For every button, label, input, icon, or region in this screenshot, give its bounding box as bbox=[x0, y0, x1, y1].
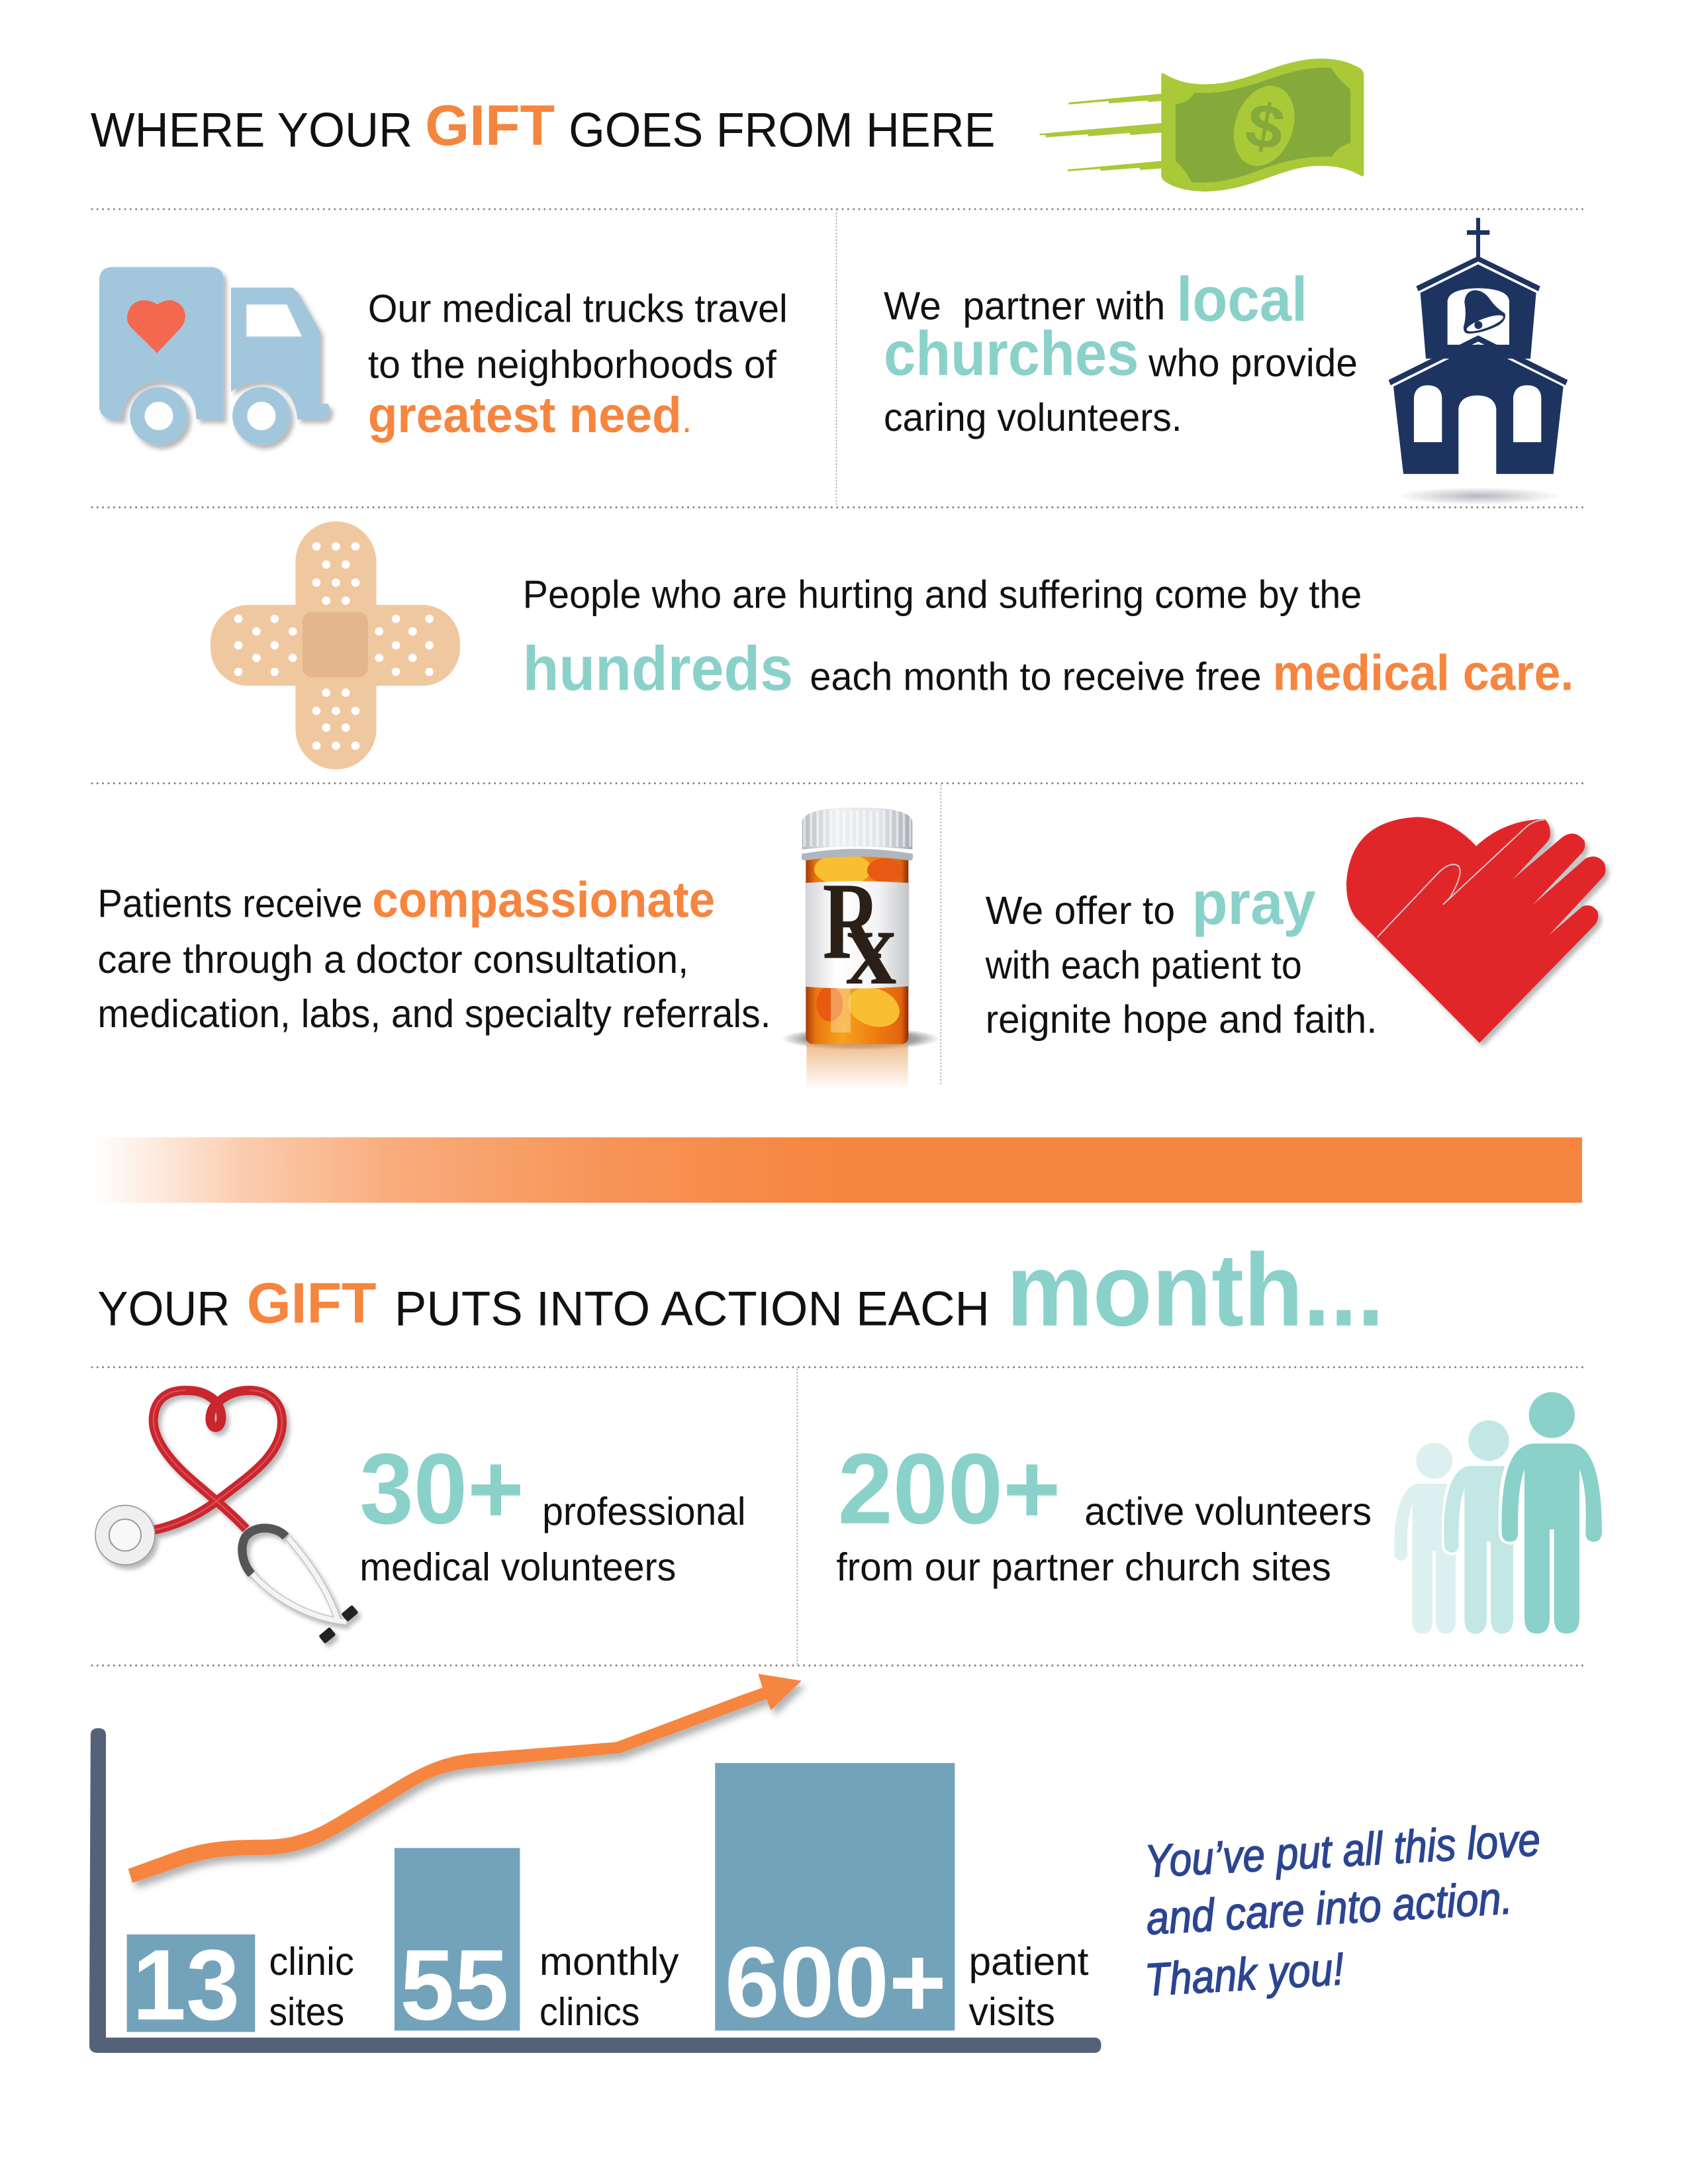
orange gradient band bbox=[95, 1137, 1582, 1203]
heading: where your gift goes from here: GOES FROM HERE bbox=[569, 102, 995, 157]
stat: 200+ active volunteers: 200+ bbox=[838, 1433, 1060, 1545]
text: local churches: who provide bbox=[1148, 342, 1358, 385]
icon: prescription bottle: x bbox=[846, 886, 896, 1008]
text: compassionate care: care through a doctor consultation, bbox=[97, 938, 688, 981]
icon: medical truck bbox=[99, 267, 330, 437]
bar: 55 monthly clinics: clinics bbox=[539, 1991, 640, 2034]
icon: three people bbox=[1394, 1392, 1602, 1633]
text: hundreds each month bbox=[523, 573, 1573, 704]
bar: 600+ patient visits: visits bbox=[968, 1991, 1055, 2034]
icon: flying dollar bill bbox=[1040, 59, 1364, 191]
heading: where your gift goes from here: GIFT bbox=[425, 94, 555, 158]
stat: 200+ active volunteers bbox=[836, 1433, 1372, 1589]
icon: heart hand bbox=[1346, 817, 1605, 1043]
icon: prescription bottle bbox=[781, 807, 940, 1090]
heading: your gift puts into action each month bbox=[97, 1233, 1384, 1348]
text: hundreds each month: People who are hurting and suffering come by the bbox=[523, 573, 1362, 616]
chart: growth bars and trend arrow bbox=[89, 1674, 1102, 2053]
icon: crossed bandage bbox=[211, 522, 460, 770]
bar: 600+ patient visits: patient bbox=[968, 1940, 1089, 1983]
text: medical trucks: Our medical trucks travel bbox=[368, 288, 788, 331]
handwritten thank you note: You’ve put all this love bbox=[1143, 1813, 1542, 1888]
stat: 30+ medical volunteers: medical volunteers bbox=[359, 1546, 676, 1589]
text: pray: with each patient to bbox=[985, 944, 1302, 987]
icon: church bbox=[1389, 218, 1568, 505]
handwritten thank you note: and care into action. bbox=[1145, 1872, 1514, 1944]
text: pray: We offer to bbox=[986, 889, 1175, 933]
text: medical trucks: to the neighborhoods of bbox=[368, 343, 776, 387]
heading: where your gift goes from here bbox=[91, 94, 995, 158]
text: compassionate care bbox=[97, 872, 771, 1036]
text: medical trucks bbox=[368, 288, 788, 443]
text: pray bbox=[985, 868, 1377, 1042]
arrow: upward trend bbox=[128, 1674, 802, 1883]
text: local churches bbox=[884, 264, 1358, 439]
stat: 30+ medical volunteers bbox=[359, 1433, 746, 1589]
stat: 30+ medical volunteers: professional bbox=[542, 1490, 746, 1533]
handwritten thank you note: Thank you! bbox=[1143, 1942, 1345, 2006]
heading: your gift puts into action each month: YOUR bbox=[97, 1281, 230, 1336]
text: local churches: caring volunteers. bbox=[884, 396, 1182, 439]
text: medical trucks: greatest need bbox=[368, 387, 682, 443]
text: hundreds each month: each month to receive free bbox=[810, 656, 1262, 699]
handwritten thank you note bbox=[1143, 1813, 1542, 2006]
stat: 200+ active volunteers: from our partner church sites bbox=[836, 1546, 1331, 1589]
text: local churches: churches bbox=[884, 319, 1139, 389]
text: pray: pray bbox=[1192, 868, 1316, 937]
heading: where your gift goes from here: WHERE YOUR bbox=[91, 102, 412, 157]
text: local churches: We partner with bbox=[884, 285, 1165, 328]
icon: stethoscope with heart tube bbox=[95, 1390, 359, 1644]
bar: 600+ patient visits: 600+ bbox=[725, 1927, 947, 2038]
heading: your gift puts into action each month: GIFT bbox=[247, 1271, 377, 1335]
bar: 13 clinic sites: clinic bbox=[269, 1940, 354, 1983]
stat: 30+ medical volunteers: 30+ bbox=[359, 1433, 524, 1545]
text: hundreds each month: hundreds bbox=[523, 634, 793, 704]
bar: 13 clinic sites: sites bbox=[269, 1991, 344, 2034]
bar: 13 clinic sites bbox=[127, 1929, 354, 2041]
icon: flying dollar bill: $ bbox=[1241, 89, 1290, 163]
bar: 55 monthly clinics bbox=[395, 1848, 679, 2041]
divider lines bbox=[92, 209, 1583, 1665]
heading: your gift puts into action each month: month... bbox=[1006, 1233, 1384, 1348]
text: local churches: local bbox=[1176, 264, 1307, 334]
chart axes bbox=[89, 1728, 1102, 2053]
icon: prescription bottle: R bbox=[823, 860, 881, 982]
text: hundreds each month: medical care. bbox=[1273, 645, 1573, 702]
text: compassionate care: medication, labs, and specialty referrals. bbox=[97, 993, 771, 1036]
bar: 55 monthly clinics: monthly bbox=[539, 1940, 679, 1983]
text: compassionate care: Patients receive bbox=[97, 883, 362, 926]
stat: 200+ active volunteers: active volunteers bbox=[1084, 1490, 1372, 1533]
bar: 13 clinic sites: 13 bbox=[132, 1929, 240, 2041]
text: medical trucks: . bbox=[682, 399, 692, 441]
heading: your gift puts into action each month: PUTS INTO ACTION EACH bbox=[395, 1281, 990, 1336]
text: compassionate care: compassionate bbox=[372, 872, 715, 929]
bar: 600+ patient visits bbox=[715, 1763, 1089, 2038]
text: pray: reignite hope and faith. bbox=[986, 999, 1377, 1042]
bar: 55 monthly clinics: 55 bbox=[400, 1929, 509, 2041]
